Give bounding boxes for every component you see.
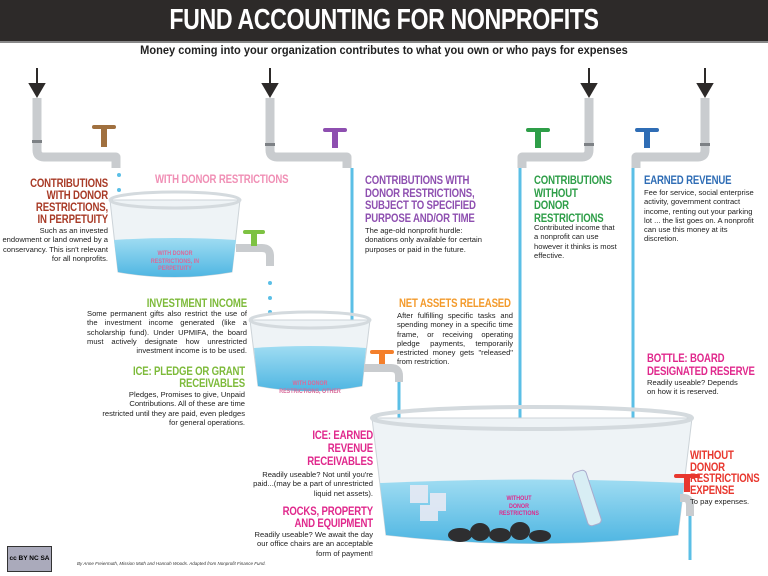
heading: expense: EXPENSE [690, 482, 734, 496]
heading: earned revenue: EARNED REVENUE [644, 173, 731, 187]
heading: purpose/time: DONOR RESTRICTIONS, [365, 186, 474, 200]
heading: expense: DONOR [690, 460, 725, 474]
text: rocks: Readily useable? We await the day our office chairs are an acceptable form of payment! [255, 530, 373, 558]
heading: ice earned [307, 428, 373, 468]
heading: bottle: BOTTLE: BOARD [647, 351, 724, 365]
heading: without restrictions: DONOR [534, 198, 569, 212]
handles [92, 125, 659, 148]
heading: ice earned: RECEIVABLES [307, 454, 373, 468]
heading: expense: WITHOUT [690, 448, 734, 462]
heading: purpose/time: CONTRIBUTIONS WITH [365, 173, 469, 187]
heading: bottle: DESIGNATED RESERVE [647, 364, 755, 378]
heading: ice earned: REVENUE [328, 441, 373, 455]
cc badge: cc BY NC SA [10, 555, 49, 562]
heading: expense: RESTRICTIONS [690, 471, 760, 485]
heading: with donor restrictions: WITH DONOR RESTRICTIONS [155, 172, 288, 186]
bowl label 3: WITHOUT DONOR RESTRICTIONS [499, 495, 539, 517]
heading: without restrictions: WITHOUT [534, 186, 578, 200]
bowl 2 [250, 320, 370, 391]
heading: rocks: AND EQUIPMENT [295, 516, 373, 530]
text: perpetuity: Such as an invested endowment or land owned by a conservancy. This isn't relevant for all nonprofits. [2, 226, 108, 263]
heading: rocks: ROCKS, PROPERTY [283, 504, 373, 518]
text: earned revenue: Fee for service, social enterprise activity, government contract income, renting out your parking lot ... the list goes on. A nonprofit can use this money at its discretion. [644, 188, 754, 243]
heading: without restrictions [534, 173, 612, 224]
text: ice pledge: Pledges, Promises to give, Unpaid Contributions. All of these are time restricted until they are paid, even pledges for general operations. [102, 390, 245, 427]
heading: perpetuity: IN PERPETUITY [38, 212, 108, 226]
text: purpose/time: The age-old nonprofit hurdle: donations only available for certain purposes or paid in the future. [365, 226, 482, 254]
heading: perpetuity [30, 176, 108, 226]
bowl 1 [110, 200, 240, 277]
heading: without restrictions: RESTRICTIONS [534, 210, 604, 224]
text: investment income: Some permanent gifts also restrict the use of the investment income generated (like a scholarship fund). Under UPMIFA, the board must actively designate how unrestricted investment income is to be used. [87, 309, 247, 355]
heading: without restrictions: CONTRIBUTIONS [534, 173, 612, 187]
text: net assets released: After fulfilling specific tasks and spending money in a specific time frame, or receiving operating pledge payments, temporarily restricted money gets "released" from restriction. [397, 311, 513, 366]
heading: purpose/time [365, 173, 476, 224]
text: ice earned: Readily useable? Not until you're paid...(may be a part of unrestricted liquid net assets). [253, 470, 373, 498]
title bar: FUND ACCOUNTING FOR NONPROFITS [169, 4, 599, 36]
heading: expense [690, 448, 760, 496]
bowl label 1: WITH DONOR RESTRICTIONS, IN PERPETUITY [151, 250, 199, 272]
big bowl [372, 418, 692, 544]
heading: perpetuity: WITH DONOR [47, 188, 108, 202]
pipes [37, 98, 705, 168]
cc badge [7, 546, 52, 572]
bowl label 2: WITH DONOR RESTRICTIONS, OTHER [279, 380, 341, 394]
heading: bottle [647, 351, 755, 378]
credit: By Anne Freiermuth, Mission Math and Hannah Woods. Adapted from Nonprofit Finance Fund. [77, 561, 266, 566]
subtitle: Money coming into your organization contributes to what you own or who pays for expenses [140, 45, 628, 57]
heading: net assets released: NET ASSETS RELEASED [399, 296, 511, 310]
heading: purpose/time: PURPOSE AND/OR TIME [365, 210, 475, 224]
arrows [30, 68, 712, 96]
title bar [0, 0, 768, 43]
text: expense: To pay expenses. [690, 497, 749, 506]
heading: investment income: INVESTMENT INCOME [147, 296, 247, 310]
heading: perpetuity: RESTRICTIONS, [36, 200, 108, 214]
heading: purpose/time: SUBJECT TO SPECIFIED [365, 198, 476, 212]
text: bottle: Readily useable? Depends on how it is reserved. [647, 378, 738, 396]
heading: ice earned: ICE: EARNED [312, 428, 373, 442]
heading: rocks [283, 504, 373, 530]
heading: ice pledge: ICE: PLEDGE OR GRANT [133, 364, 245, 378]
heading: ice pledge: RECEIVABLES [179, 376, 245, 390]
streams [352, 168, 690, 560]
heading: perpetuity: CONTRIBUTIONS [30, 176, 108, 190]
text: without restrictions: Contributed income that a nonprofit can use however it thinks is most effective. [534, 223, 617, 260]
heading: ice pledge [133, 364, 245, 390]
